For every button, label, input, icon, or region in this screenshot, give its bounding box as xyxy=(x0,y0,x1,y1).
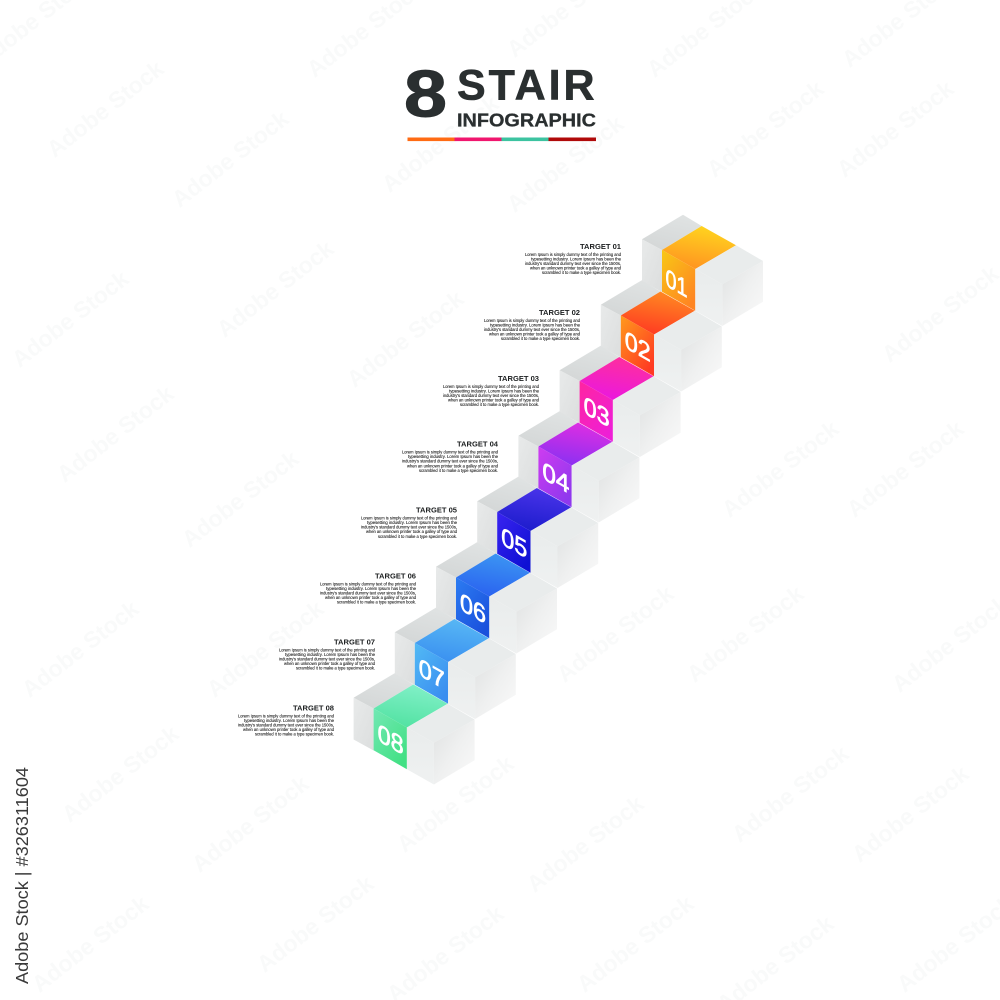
text block: target 02 xyxy=(484,308,580,342)
watermark pattern: Adobe Stock xyxy=(877,260,1000,367)
step 05 xyxy=(477,477,598,588)
watermark pattern: Adobe Stock xyxy=(392,750,519,857)
text block: target 05 xyxy=(361,506,458,540)
step number 07: 07 xyxy=(419,653,445,695)
step number 08: 08 xyxy=(378,718,404,761)
text block: target 01: scrambled it to make a type specimen book. xyxy=(542,270,621,276)
text block: target 07: Lorem Ipsum is simply dummy text of the printing and xyxy=(279,647,375,653)
text block: target 04: typesetting industry. Lorem Ipsum has been the xyxy=(408,454,498,460)
watermark pattern: Adobe Stock xyxy=(202,595,329,702)
watermark pattern: Adobe Stock xyxy=(717,415,844,522)
text block: target 05: when an unknown printer took a galley of type and xyxy=(366,529,457,535)
text block: target 01: typesetting industry. Lorem Ipsum has been the xyxy=(531,256,621,262)
text block: target 04: when an unknown printer took a galley of type and xyxy=(407,463,498,469)
text block: target 08: Lorem Ipsum is simply dummy text of the printing and xyxy=(238,713,334,719)
text block: target 03: when an unknown printer took a galley of type and xyxy=(448,397,539,403)
step 07 xyxy=(395,608,516,719)
watermark pattern: Adobe Stock xyxy=(342,285,469,392)
watermark pattern: Adobe Stock xyxy=(57,720,184,827)
text block: target 06: Lorem Ipsum is simply dummy text of the printing and xyxy=(320,582,416,588)
text block: target 08: when an unknown printer took a galley of type and xyxy=(243,727,334,733)
title word INFOGRAPHIC: INFOGRAPHIC xyxy=(457,110,596,130)
text block: target 07: TARGET 07 xyxy=(334,637,375,646)
step 03 xyxy=(560,346,681,457)
text block: target 06: scrambled it to make a type specimen book. xyxy=(337,600,416,606)
text block: target 07 xyxy=(279,637,375,672)
step number 04: 04 xyxy=(542,456,569,499)
text block: target 05: scrambled it to make a type specimen book. xyxy=(378,534,457,540)
step number 01: 01 xyxy=(666,263,688,304)
text block: target 07: industry's standard dummy text ever since the 1500s, xyxy=(279,656,375,662)
text block: target 01: TARGET 01 xyxy=(580,242,622,251)
watermark pattern: Adobe Stock xyxy=(7,265,134,372)
watermark pattern: Adobe Stock xyxy=(832,75,959,182)
watermark pattern: Adobe Stock xyxy=(702,75,829,182)
text block: target 06: when an unknown printer took a galley of type and xyxy=(325,595,416,601)
vertical stock credit: Adobe Stock | #326311604 xyxy=(12,767,32,984)
title xyxy=(404,56,596,141)
watermark pattern: Adobe Stock xyxy=(17,595,144,702)
text block: target 05: typesetting industry. Lorem Ipsum has been the xyxy=(367,520,457,526)
title numeral 8: 8 xyxy=(404,56,447,130)
watermark pattern: Adobe Stock xyxy=(842,415,969,522)
title word STAIR: STAIR xyxy=(457,62,596,110)
step 06 xyxy=(436,542,557,654)
watermark pattern: Adobe Stock xyxy=(42,55,169,162)
text block: target 04: industry's standard dummy text ever since the 1500s, xyxy=(402,459,498,465)
watermark pattern: Adobe Stock xyxy=(682,580,809,687)
text block: target 02: scrambled it to make a type specimen book. xyxy=(501,336,580,342)
watermark pattern: Adobe Stock xyxy=(552,580,679,687)
step number 02: 02 xyxy=(625,325,651,368)
step 08 xyxy=(354,673,475,784)
text block: target 01: when an unknown printer took a galley of type and xyxy=(530,266,621,272)
title colour bar xyxy=(408,138,596,141)
watermark pattern: Adobe Stock xyxy=(252,870,379,977)
watermark pattern: Adobe Stock xyxy=(727,740,854,847)
text block: target 04: TARGET 04 xyxy=(457,440,499,449)
text block: target 08: industry's standard dummy text ever since the 1500s, xyxy=(238,722,334,728)
text block: target 04: Lorem Ipsum is simply dummy text of the printing and xyxy=(402,450,498,456)
text block: target 05: Lorem Ipsum is simply dummy text of the printing and xyxy=(361,516,457,522)
watermark pattern: Adobe Stock xyxy=(847,760,974,867)
text block: target 06: industry's standard dummy text ever since the 1500s, xyxy=(320,590,416,596)
text block: target 02: TARGET 02 xyxy=(539,308,580,317)
text block: target 02: industry's standard dummy text ever since the 1500s, xyxy=(484,327,580,333)
step number 03: 03 xyxy=(584,391,610,433)
text block: target 01 xyxy=(525,242,622,276)
text block: target 08 xyxy=(238,703,334,738)
text block: target 08: scrambled it to make a type specimen book. xyxy=(255,732,334,738)
step 04 xyxy=(518,411,639,522)
text block: target 03: typesetting industry. Lorem Ipsum has been the xyxy=(449,388,539,394)
watermark pattern: Adobe Stock xyxy=(27,890,154,997)
text block: target 04 xyxy=(402,440,499,474)
step number 05: 05 xyxy=(501,522,527,564)
text block: target 03 xyxy=(443,374,539,408)
text block: target 03: TARGET 03 xyxy=(498,374,539,383)
text block: target 04: scrambled it to make a type specimen book. xyxy=(419,468,498,474)
watermark pattern: Adobe Stock xyxy=(177,445,304,552)
watermark pattern: Adobe Stock xyxy=(167,105,294,212)
text block: target 05: TARGET 05 xyxy=(416,506,458,515)
watermark pattern: Adobe Stock xyxy=(377,90,504,197)
text block: target 02: when an unknown printer took a galley of type and xyxy=(489,332,580,338)
text block: target 01: industry's standard dummy text ever since the 1500s, xyxy=(525,261,621,267)
text block: target 03: industry's standard dummy text ever since the 1500s, xyxy=(443,393,539,399)
text block: target 06: typesetting industry. Lorem Ipsum has been the xyxy=(326,586,416,592)
step number 06: 06 xyxy=(460,587,486,630)
text block: target 03: scrambled it to make a type specimen book. xyxy=(460,402,539,408)
text block: target 06: TARGET 06 xyxy=(375,572,416,580)
text block: target 07: scrambled it to make a type specimen book. xyxy=(296,666,375,672)
watermark pattern: Adobe Stock xyxy=(522,790,649,897)
text block: target 02: typesetting industry. Lorem Ipsum has been the xyxy=(490,322,580,328)
step 01 xyxy=(642,215,763,326)
text block: target 02: Lorem Ipsum is simply dummy text of the printing and xyxy=(484,318,580,324)
watermark pattern: Adobe Stock xyxy=(187,770,314,877)
text block: target 07: when an unknown printer took a galley of type and xyxy=(284,661,375,667)
text block: target 06 xyxy=(320,572,416,606)
text block: target 08: typesetting industry. Lorem Ipsum has been the xyxy=(244,718,334,724)
watermark pattern: Adobe Stock xyxy=(502,110,629,217)
watermark pattern: Adobe Stock xyxy=(52,380,179,487)
step 02 xyxy=(601,280,722,392)
watermark pattern: Adobe Stock xyxy=(572,890,699,997)
text block: target 01: Lorem Ipsum is simply dummy text of the printing and xyxy=(525,252,621,258)
text block: target 05: industry's standard dummy text ever since the 1500s, xyxy=(361,525,457,531)
text block: target 07: typesetting industry. Lorem Ipsum has been the xyxy=(285,652,375,658)
watermark pattern: Adobe Stock xyxy=(212,235,339,342)
text block: target 08: TARGET 08 xyxy=(293,703,334,712)
text block: target 03: Lorem Ipsum is simply dummy text of the printing and xyxy=(443,384,539,390)
